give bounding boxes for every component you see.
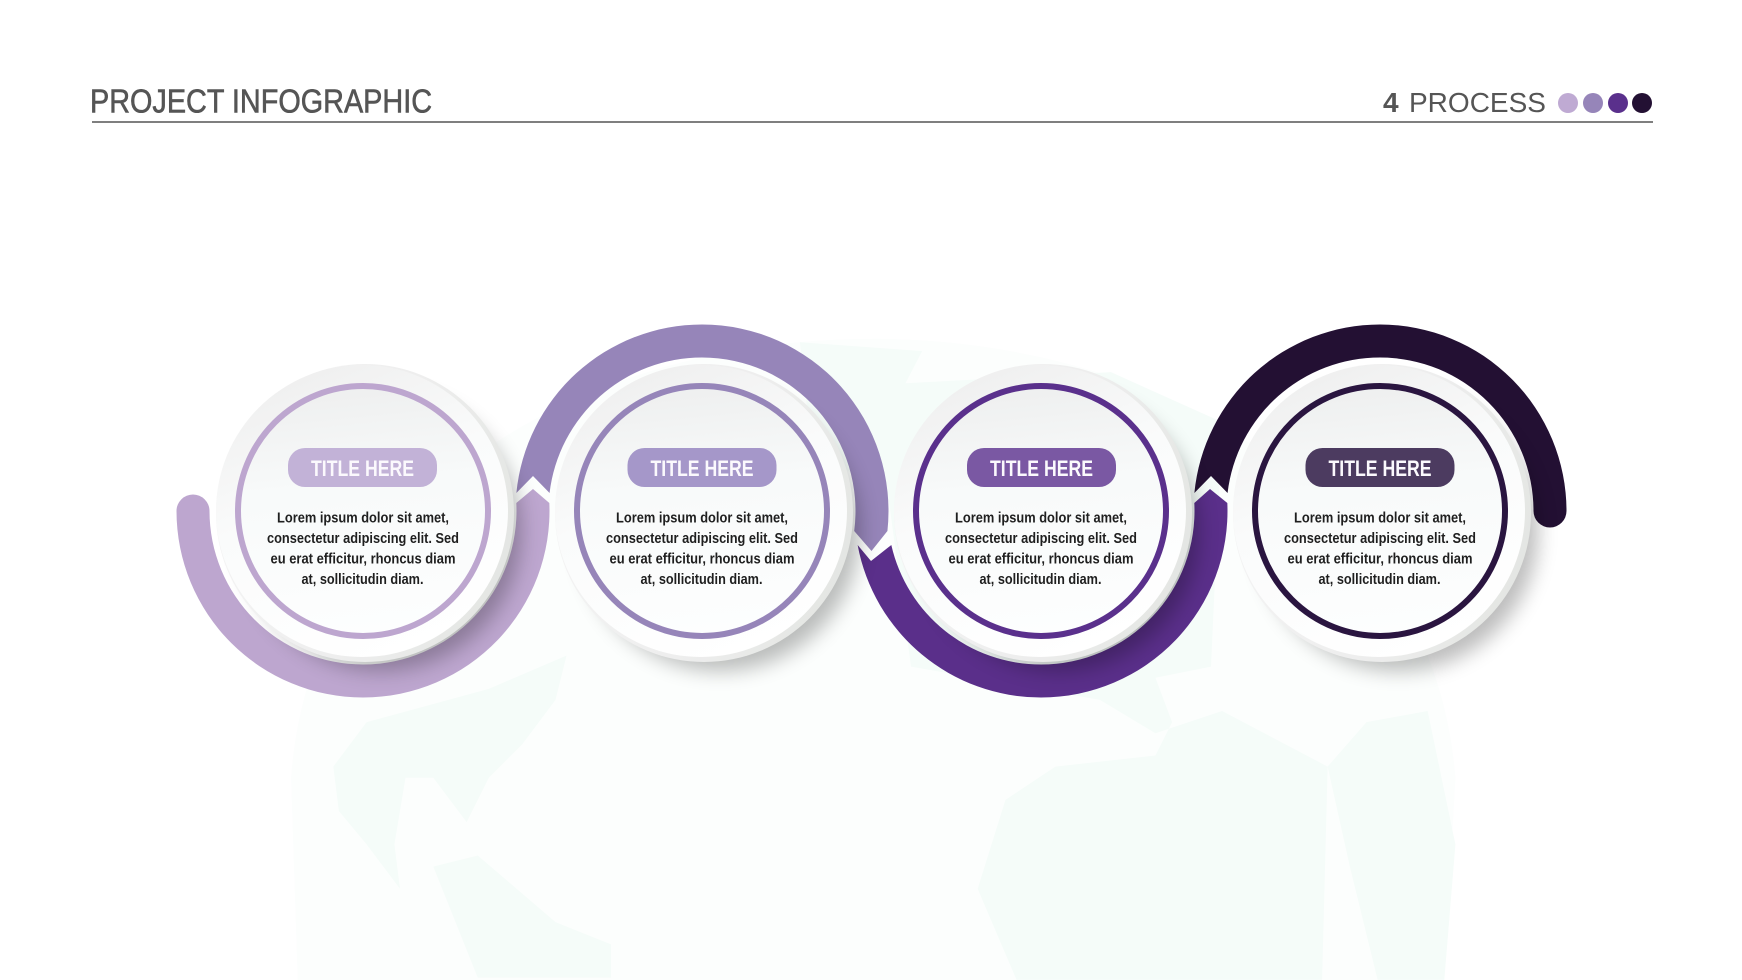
process count label: PROCESS: [1409, 87, 1546, 118]
ring 1: [238, 386, 488, 636]
body text 2: eu erat efficitur, rhoncus diam: [610, 552, 794, 568]
body text 2: consectetur adipiscing elit. Sed: [606, 531, 798, 547]
body text 4: at, sollicitudin diam.: [1318, 572, 1440, 588]
disc shadows: [241, 391, 1538, 671]
body text 3: [945, 510, 1137, 588]
title pill 3: [967, 448, 1116, 487]
title pill 4: [1306, 448, 1454, 487]
arc 1: [176, 489, 550, 698]
title pill 2: [628, 448, 776, 487]
title pill 3: TITLE HERE: [990, 456, 1093, 481]
title pill 1: TITLE HERE: [311, 456, 414, 481]
title pill 1: [288, 448, 437, 487]
body text 3: Lorem ipsum dolor sit amet,: [955, 510, 1127, 526]
body text 4: consectetur adipiscing elit. Sed: [1284, 531, 1476, 547]
arc 4: [1194, 324, 1566, 528]
panel: step 1: [216, 364, 514, 662]
title pill 2: TITLE HERE: [650, 456, 754, 481]
body text 1: eu erat efficitur, rhoncus diam: [270, 552, 456, 568]
process count label: 4: [1383, 87, 1399, 118]
body text 1: at, sollicitudin diam.: [302, 572, 424, 588]
arc 3: [858, 489, 1228, 698]
body text 3: consectetur adipiscing elit. Sed: [945, 531, 1137, 547]
title: PROJECT INFOGRAPHIC: [90, 82, 432, 120]
legend dots: [1558, 93, 1652, 113]
arc 2: [516, 324, 888, 551]
body text 4: eu erat efficitur, rhoncus diam: [1288, 552, 1472, 568]
title pill 4: TITLE HERE: [1328, 456, 1432, 481]
body text 1: consectetur adipiscing elit. Sed: [267, 531, 459, 547]
body text 1: [267, 510, 459, 588]
body text 3: at, sollicitudin diam.: [980, 572, 1102, 588]
body text 1: Lorem ipsum dolor sit amet,: [277, 510, 449, 526]
body text 4: [1284, 510, 1476, 588]
body text 2: at, sollicitudin diam.: [640, 572, 762, 588]
ring 2: [577, 386, 827, 636]
panel: step 2: [555, 364, 853, 662]
ring 4: [1255, 386, 1505, 636]
body text 4: Lorem ipsum dolor sit amet,: [1294, 510, 1466, 526]
body text 2: [606, 510, 798, 588]
panel: step 3: [894, 364, 1192, 662]
header: [90, 82, 1653, 123]
background world map: [291, 339, 1455, 980]
body text 2: Lorem ipsum dolor sit amet,: [616, 510, 788, 526]
panel: step 4: [1233, 364, 1531, 662]
body text 3: eu erat efficitur, rhoncus diam: [948, 552, 1134, 568]
ring 3: [916, 386, 1166, 636]
